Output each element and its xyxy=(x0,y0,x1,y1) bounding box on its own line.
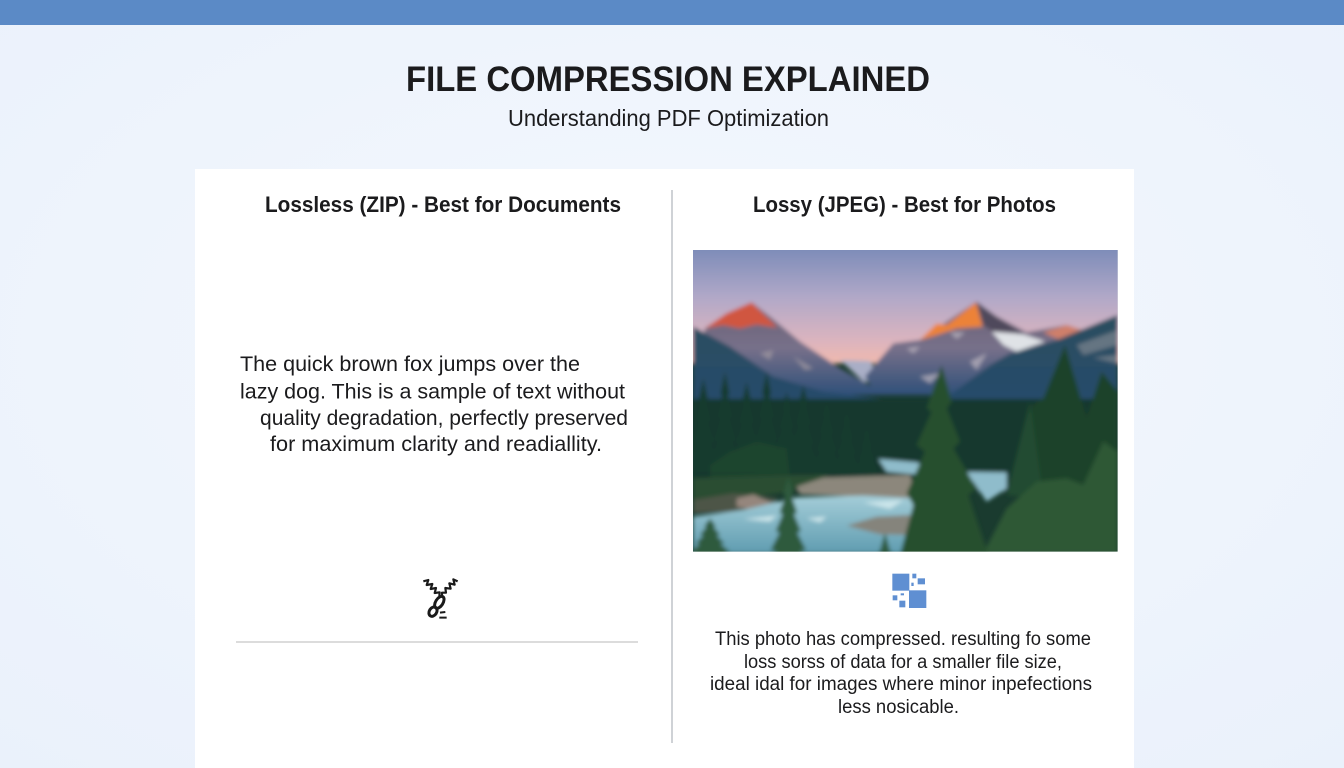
text block: lossy description: ideal idal for images where minor inpefections xyxy=(710,674,1092,695)
text block: lossy description: less nosicable. xyxy=(838,697,959,718)
horizontal rule xyxy=(236,641,638,643)
text block: lossy description: loss sorss of data for a smaller file size, xyxy=(744,652,1062,673)
panel: lossless column xyxy=(236,192,638,643)
text block: lossy description xyxy=(710,629,1092,718)
right tree group xyxy=(1034,346,1118,482)
foreground tree xyxy=(900,365,988,555)
foreground ridges xyxy=(693,327,890,403)
text block: lossless sample: lazy dog. This is a sample of text without xyxy=(240,380,625,404)
mid forest xyxy=(693,399,1118,492)
text block: lossless sample xyxy=(240,353,628,456)
heading: lossless: Lossless (ZIP) - Best for Documents xyxy=(265,192,621,217)
icon: zipper xyxy=(423,579,458,618)
subtitle: Understanding PDF Optimization xyxy=(508,105,829,131)
top bar xyxy=(0,0,1344,25)
text block: lossy description: This photo has compressed. resulting fo some xyxy=(715,629,1091,650)
gravel bar xyxy=(797,475,917,498)
icon: compressed blocks xyxy=(892,574,926,608)
upper water xyxy=(878,459,1007,502)
distant peak xyxy=(840,360,883,382)
small foreground trees xyxy=(687,477,892,557)
photo: mountain landscape xyxy=(683,242,1127,557)
water xyxy=(693,496,923,553)
title: FILE COMPRESSION EXPLAINED xyxy=(406,60,930,99)
right mountain xyxy=(865,302,1085,395)
panel: comparison card xyxy=(195,169,1134,768)
heading: lossy: Lossy (JPEG) - Best for Photos xyxy=(753,192,1056,217)
text block: lossless sample: The quick brown fox jumps over the xyxy=(240,353,580,376)
left mountain xyxy=(703,302,887,395)
text block: lossless sample: quality degradation, perfectly preserved xyxy=(260,407,628,430)
panel: lossy column xyxy=(683,192,1127,718)
text block: lossless sample: for maximum clarity and readiallity. xyxy=(270,433,602,456)
left tree line xyxy=(698,374,808,402)
